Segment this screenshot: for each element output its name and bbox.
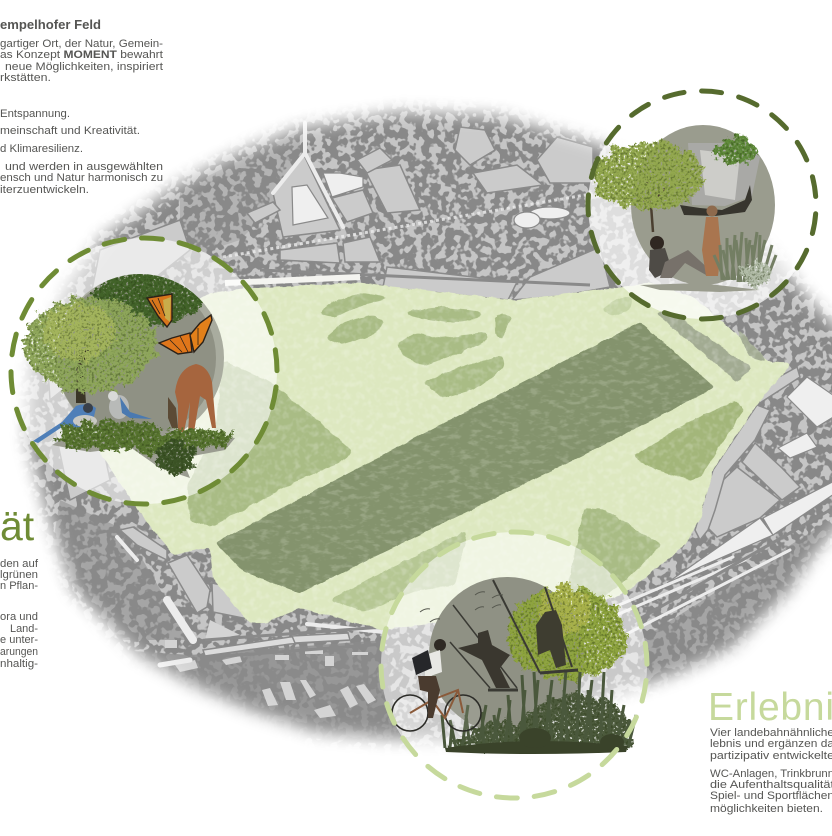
text block: biodiversity: n Pflan- — [0, 580, 38, 592]
meadow patches — [187, 293, 770, 612]
text block: experience: Vier landebahnähnliche — [710, 727, 832, 739]
deer — [168, 364, 216, 432]
text block: biodiversity: den auf — [0, 558, 38, 570]
planter plants — [717, 138, 757, 162]
patch west triangle — [187, 360, 352, 527]
list: meinschaft und Kreativität. — [0, 125, 140, 137]
inset disc — [631, 125, 775, 292]
text block: biodiversity: arungen — [0, 646, 38, 658]
planter — [680, 143, 760, 216]
paragraph: as Konzept MOMENT bewahrt — [0, 49, 163, 61]
runway: central dark strip — [215, 322, 715, 593]
text block: biodiversity — [0, 558, 39, 670]
tree — [24, 297, 156, 403]
patch c — [402, 307, 485, 323]
patch d — [495, 312, 512, 340]
text block: experience: möglichkeiten bieten. — [710, 803, 823, 815]
paragraph — [0, 38, 164, 84]
text block: experience: partizipativ entwickelte — [710, 750, 832, 762]
patch b — [325, 315, 385, 345]
paragraph: gartiger Ort, der Natur, Gemein- — [0, 38, 164, 50]
paragraph: neue Möglichkeiten, inspiriert — [5, 61, 163, 73]
plants — [442, 670, 636, 754]
child on swing right — [536, 610, 566, 668]
closing paragraph — [0, 161, 163, 196]
birds — [420, 592, 503, 622]
patch south — [328, 530, 467, 612]
tree — [507, 586, 627, 680]
bird right — [108, 391, 152, 419]
text block: biodiversity: nhaltig- — [0, 658, 39, 670]
closing paragraph: ensch und Natur harmonisch zu — [0, 172, 163, 184]
text block: biodiversity: ora und — [0, 611, 38, 623]
text block: experience: die Aufenthaltsqualität — [710, 779, 832, 791]
standing child — [702, 206, 721, 276]
heading: empelhofer Feld — [0, 18, 101, 32]
list — [0, 108, 140, 155]
text block: biodiversity: lgrünen — [0, 569, 38, 581]
list: d Klimaresilienz. — [0, 143, 83, 155]
butterfly lower — [159, 315, 212, 354]
text block: experience — [710, 727, 832, 815]
inset: biodiversity — [24, 268, 235, 478]
ground shadow — [52, 430, 235, 478]
swings — [450, 580, 578, 690]
circle 1 overlay — [11, 238, 277, 504]
dashed ring 3 — [381, 532, 647, 798]
text block: experience: Spiel- und Sportflächen — [710, 790, 832, 802]
top tree canopy — [94, 268, 206, 324]
seated person — [649, 236, 710, 278]
bush — [156, 440, 196, 472]
lower district light plots — [165, 620, 376, 718]
field: light green meadow — [95, 283, 792, 630]
cyclist — [392, 639, 481, 731]
heading: experience: Erlebni — [708, 686, 832, 729]
bird left — [33, 403, 97, 443]
inset: experience — [392, 577, 636, 754]
text block: experience: WC-Anlagen, Trinkbrunn — [710, 768, 832, 780]
patch a — [317, 293, 393, 317]
butterfly upper — [147, 294, 172, 327]
patch grey strip — [655, 310, 752, 382]
tree — [592, 142, 704, 232]
child on swing left — [458, 630, 510, 688]
dashed ring 1 — [11, 238, 277, 504]
patch east — [632, 400, 744, 480]
text block: biodiversity: Land- — [10, 623, 38, 635]
patch strip edge — [733, 323, 770, 363]
list: Entspannung. — [0, 108, 70, 120]
patch e — [397, 333, 488, 366]
closing paragraph: iterzuentwickeln. — [0, 184, 89, 196]
patch south east — [567, 508, 662, 600]
grass — [52, 420, 230, 454]
inset disc — [429, 577, 585, 733]
heading: biodiversity: ät — [0, 503, 35, 549]
dashed ring 2 — [588, 91, 816, 319]
reeds — [714, 232, 776, 282]
circle 3 overlay — [381, 532, 647, 798]
closing paragraph: und werden in ausgewählten — [5, 161, 163, 173]
text block: Tempelhofer Feld intro — [0, 18, 164, 196]
inset: recreation — [592, 125, 776, 292]
patch f — [422, 356, 505, 398]
field edge: pale strip along top — [225, 277, 360, 283]
inset disc — [56, 274, 224, 442]
text block: experience: lebnis und ergänzen da — [710, 738, 832, 750]
circle 2 overlay — [588, 91, 816, 319]
text block: biodiversity: e unter- — [0, 634, 38, 646]
dark district tone — [120, 640, 400, 745]
flower bush — [738, 262, 772, 286]
patch north east — [600, 297, 632, 316]
paragraph: rkstätten. — [0, 72, 51, 84]
